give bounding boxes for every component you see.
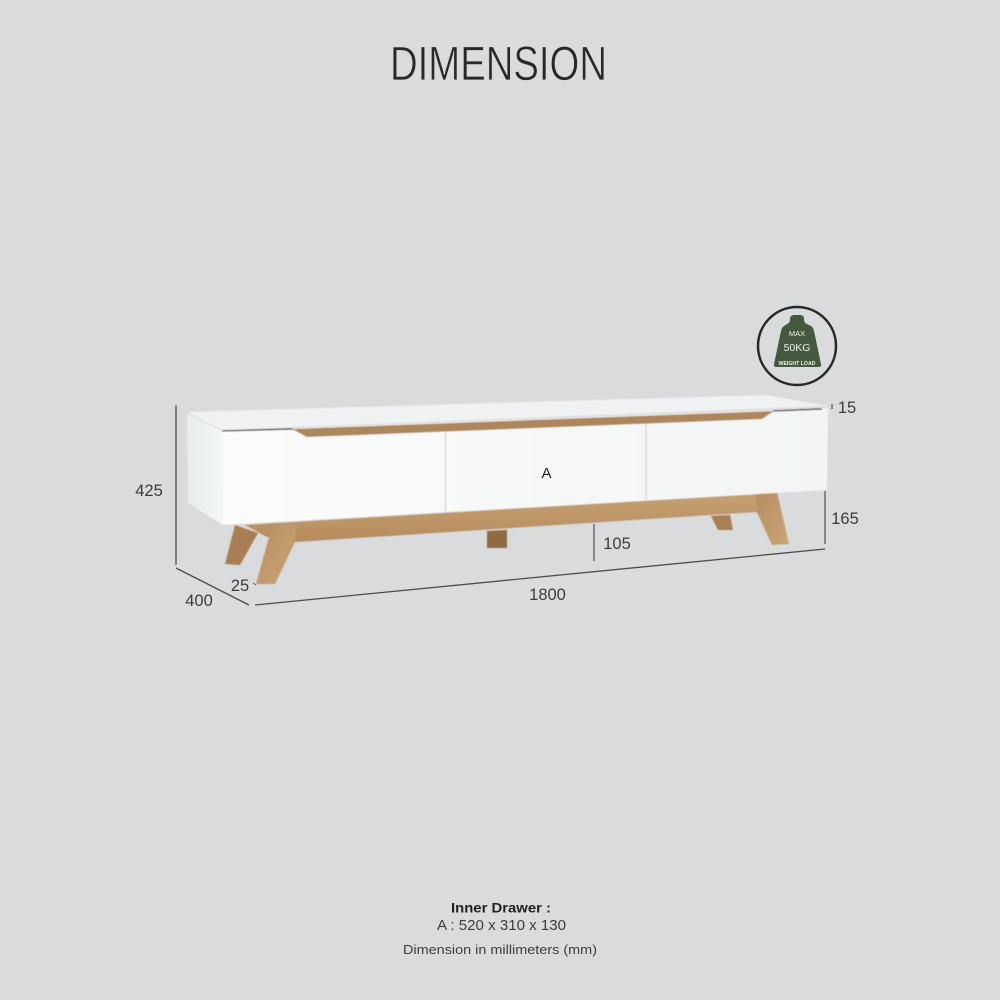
wooden base rail <box>245 493 777 542</box>
drawer divider left <box>444 432 446 512</box>
drawer label A: A <box>541 465 552 482</box>
TV console illustration <box>187 395 828 584</box>
cabinet left side <box>187 413 223 525</box>
top thickness tick 15 <box>831 404 833 409</box>
right top edge shadow line <box>773 409 822 411</box>
label 15: 15 <box>838 399 856 417</box>
title: DIMENSION <box>390 38 607 91</box>
front right leg <box>756 492 789 545</box>
depth line 400 <box>176 568 249 605</box>
clearance line 105 <box>593 524 595 561</box>
wood handle strip <box>292 411 774 437</box>
cabinet top surface <box>187 395 828 430</box>
label 400: 400 <box>185 592 213 610</box>
drawer divider right <box>645 424 647 500</box>
height line 425 <box>175 405 177 565</box>
inner drawer notes: Dimension in millimeters (mm) <box>403 942 597 957</box>
icon: max weight load badge: 50KG <box>784 342 810 354</box>
icon: max weight load badge: WEIGHT LOAD <box>779 361 816 367</box>
inner drawer notes: A : 520 x 310 x 130 <box>437 918 566 934</box>
front left leg <box>256 523 296 584</box>
inner drawer notes <box>403 900 597 957</box>
left top edge shadow line <box>222 429 293 431</box>
label 425: 425 <box>135 482 163 500</box>
icon: max weight load badge: MAX <box>789 329 805 338</box>
label 1800: 1800 <box>529 586 566 604</box>
cabinet front <box>222 408 828 525</box>
leg height line 165 <box>824 491 826 544</box>
label 25: 25 <box>231 577 249 595</box>
leg width tick 25 <box>253 583 256 585</box>
icon: max weight load badge <box>758 307 836 385</box>
back legs <box>225 515 733 565</box>
label 105: 105 <box>603 535 631 553</box>
label 165: 165 <box>831 510 859 528</box>
width line 1800 <box>255 549 825 605</box>
inner drawer notes: Inner Drawer : <box>451 900 551 916</box>
